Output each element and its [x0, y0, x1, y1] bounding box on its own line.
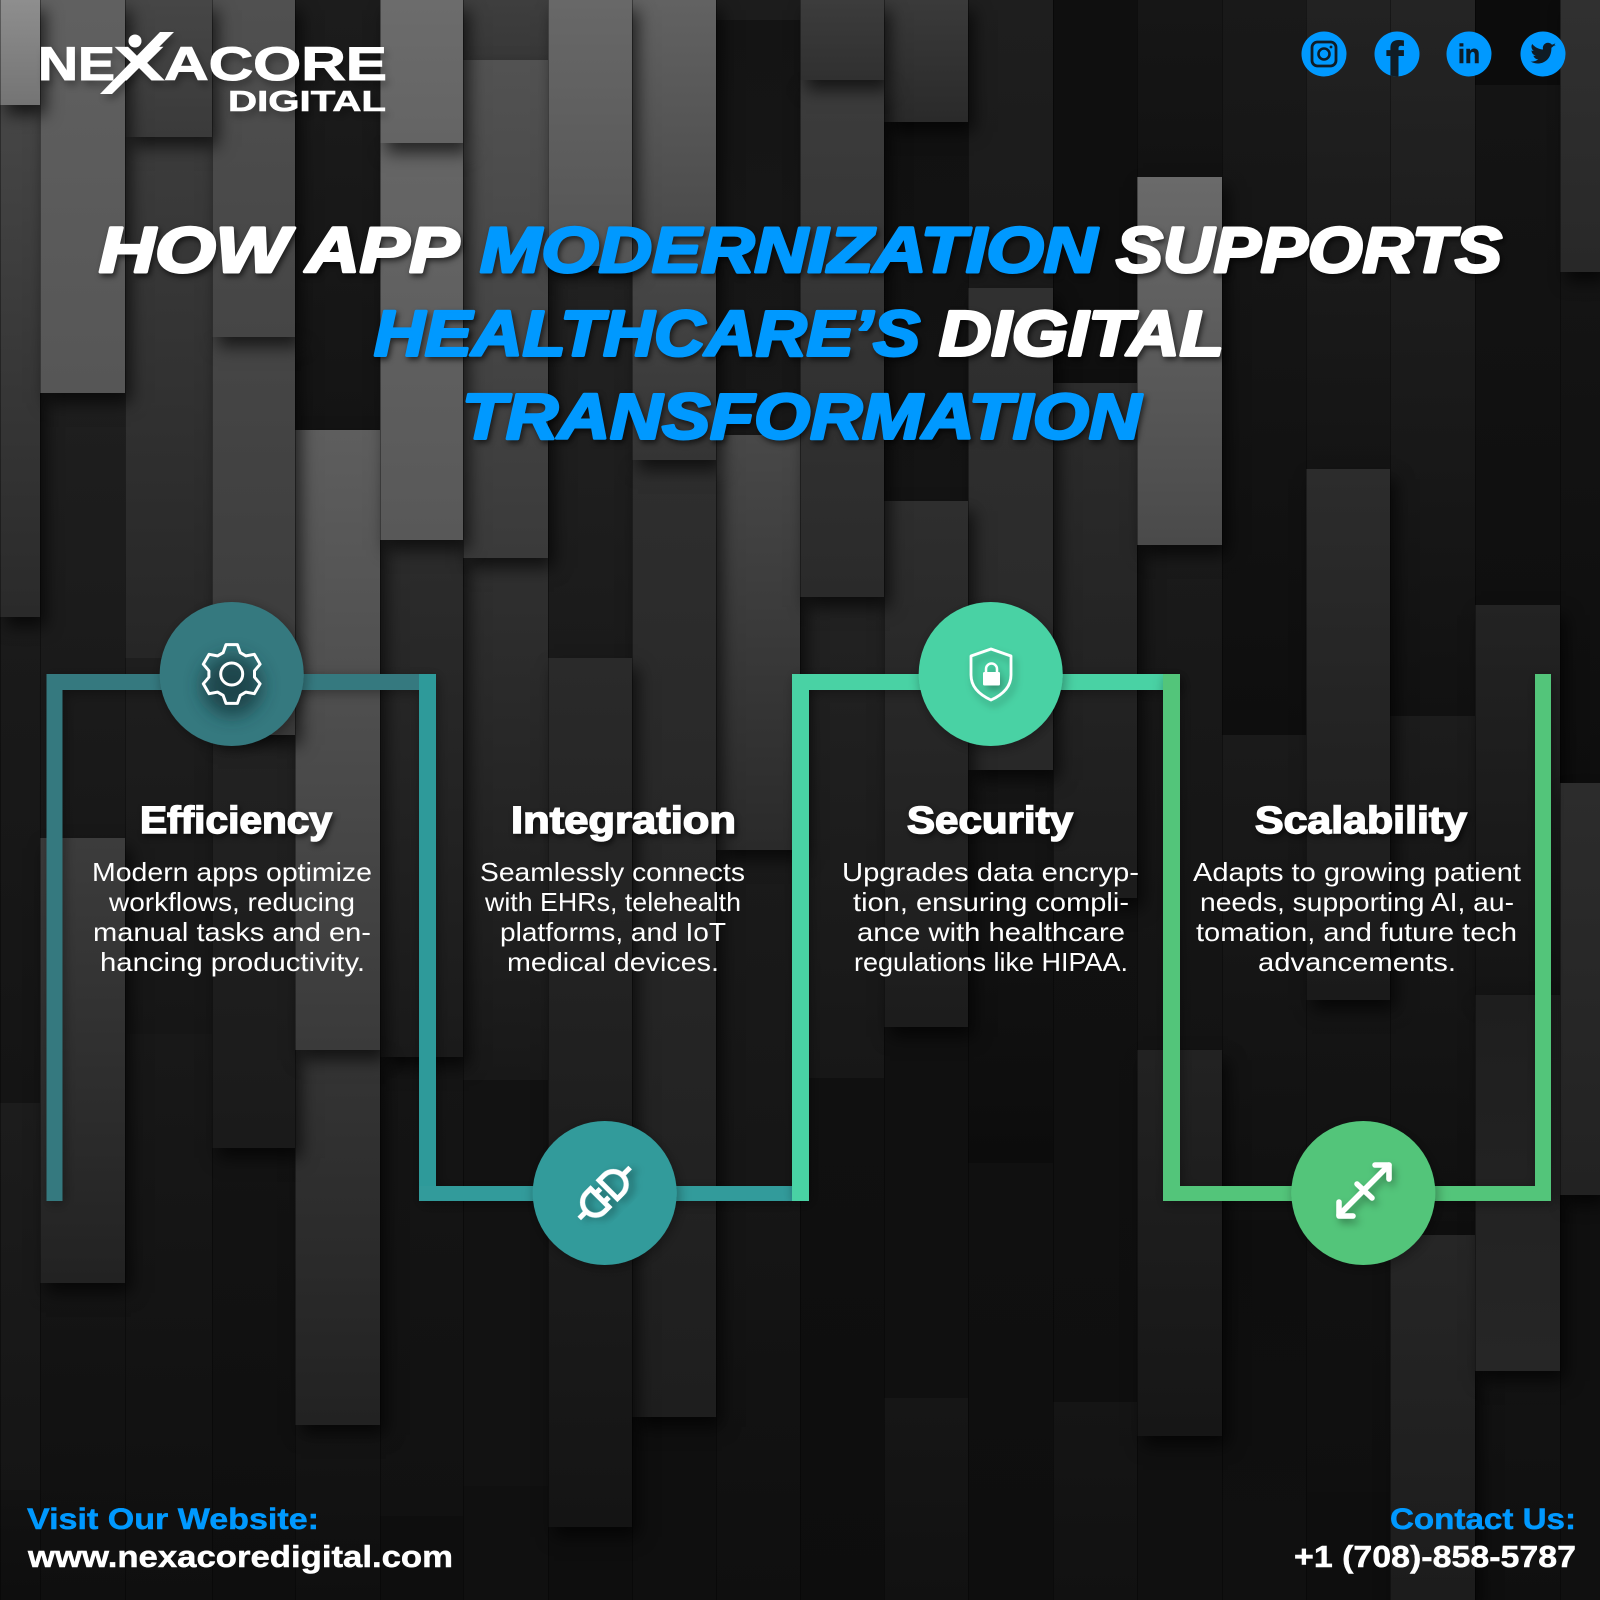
icon: instagram	[1302, 32, 1346, 76]
text: integration description	[480, 857, 745, 977]
logo: Nexacore Digital	[38, 32, 387, 118]
panel: integration	[480, 800, 745, 1265]
icon: facebook: f	[1386, 32, 1404, 90]
title line 1	[99, 214, 1502, 286]
title line 2	[374, 298, 1224, 370]
icon: facebook	[1374, 32, 1420, 76]
text: security description: Upgrades data encryp-	[842, 857, 1139, 887]
logo wordmark: NE: NE	[38, 37, 115, 90]
icon: linkedin: in	[1458, 39, 1480, 69]
text: scalability description	[1193, 857, 1522, 977]
text: security description	[842, 857, 1139, 977]
icon: diagonal resize arrows	[1291, 1121, 1435, 1265]
heading: efficiency: Efficiency	[140, 800, 332, 842]
text: integration description: platforms, and IoT	[500, 917, 726, 947]
social icons	[1302, 32, 1566, 76]
text: scalability description: needs, supporting AI, au-	[1200, 887, 1514, 917]
title line 1: SUPPORTS	[1116, 214, 1502, 286]
connector: teal stepped line	[46, 674, 792, 1201]
heading: scalability: Scalability	[1255, 800, 1467, 842]
title line 1: APP	[304, 214, 459, 286]
footer: website: www.nexacoredigital.com	[27, 1539, 453, 1574]
heading: integration: Integration	[511, 800, 736, 842]
footer: website	[27, 1503, 453, 1574]
icon: linkedin	[1446, 32, 1492, 76]
heading: security: Security	[907, 800, 1073, 842]
logo wordmark: ACORE: ACORE	[164, 37, 387, 90]
text: integration description: Seamlessly connects	[480, 857, 745, 887]
text: scalability description: Adapts to growing patient	[1193, 857, 1522, 887]
connector: green stepped line	[1163, 674, 1551, 1201]
footer: contact	[1294, 1503, 1576, 1574]
text: integration description: with EHRs, telehealth	[484, 887, 741, 917]
connector: mint stepped line	[792, 674, 1180, 1201]
text: security description: regulations like HIPAA.	[854, 947, 1128, 977]
icon: shield with lock	[919, 602, 1063, 746]
panel: efficiency	[92, 602, 372, 977]
text: efficiency description: workflows, reducing	[108, 887, 355, 917]
text: efficiency description: hancing productivity.	[100, 947, 365, 977]
text: efficiency description	[92, 857, 372, 977]
text: efficiency description: Modern apps optimize	[92, 857, 372, 887]
text: scalability description: advancements.	[1258, 947, 1456, 977]
panel: security	[842, 602, 1139, 977]
footer: website: Visit Our Website:	[27, 1503, 319, 1536]
icon: plug	[533, 1121, 677, 1265]
text: scalability description: tomation, and future tech	[1196, 917, 1517, 947]
title line 2: DIGITAL	[939, 298, 1224, 370]
icon: gear	[160, 602, 304, 746]
title line 2: HEALTHCARE’S	[374, 298, 920, 370]
logo mark: stylised X with figure	[100, 32, 174, 94]
logo wordmark: DIGITAL: DIGITAL	[228, 86, 386, 118]
title line 1: HOW	[99, 214, 295, 286]
logo mark: stylised X with figure: X	[114, 37, 164, 90]
footer: contact: +1 (708)-858-5787	[1294, 1539, 1576, 1574]
text: efficiency description: manual tasks and en-	[93, 917, 371, 947]
text: security description: tion, ensuring compli-	[853, 887, 1129, 917]
footer: contact: Contact Us:	[1390, 1503, 1576, 1536]
panel: scalability	[1193, 800, 1522, 1265]
title	[99, 214, 1502, 452]
icon: twitter	[1520, 32, 1566, 76]
title line 3: TRANSFORMATION	[462, 380, 1143, 452]
text: security description: ance with healthcare	[857, 917, 1125, 947]
text: integration description: medical devices.	[507, 947, 719, 977]
title line 1: MODERNIZATION	[480, 214, 1099, 286]
